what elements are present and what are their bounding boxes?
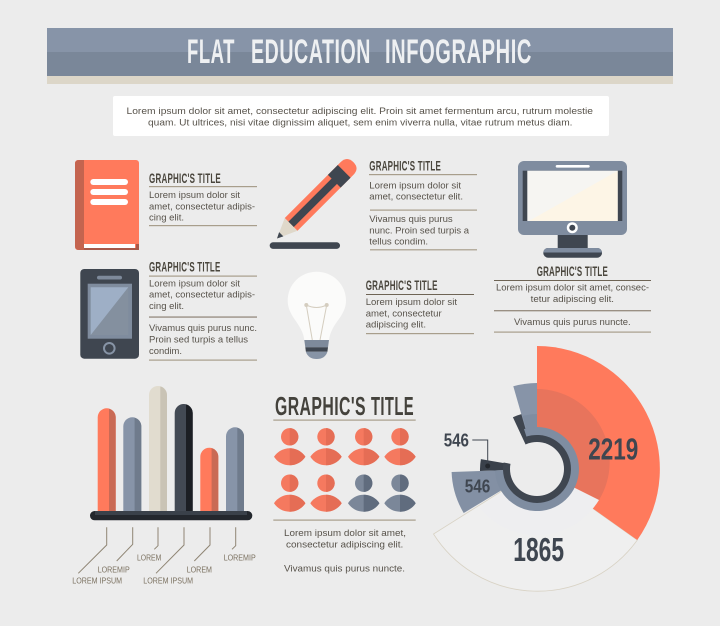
text block: bulb: adipiscing elit. — [366, 320, 426, 331]
text block: bulb: amet, consectetur — [366, 308, 442, 319]
bar 1 — [98, 408, 116, 511]
text block: phone: amet, consectetur adipis- — [149, 290, 255, 301]
text block: book: cing elit. — [149, 213, 184, 224]
text block: book — [149, 170, 257, 226]
heading: people chart: TITLE — [371, 391, 414, 421]
bar chart leader lines and labels: LOREM IPSUM — [143, 577, 193, 586]
bar chart leader lines and labels: LOREM — [137, 554, 161, 563]
text block: pencil: Lorem ipsum dolor sit — [369, 180, 461, 191]
text block: pencil: amet, consectetur elit. — [369, 192, 463, 203]
pictogram: people — [274, 428, 416, 512]
text block: book: amet, consectetur adipis- — [149, 201, 255, 212]
title — [187, 33, 532, 71]
intro text box: Lorem ipsum dolor sit amet, consectetur adipiscing elit. Proin sit amet fermentum arcu, rutrum molestie — [126, 106, 593, 117]
chart base — [90, 511, 252, 520]
value: 546 inside: 546 — [465, 477, 490, 497]
header banner — [47, 28, 673, 84]
text block: monitor: GRAPHIC'S TITLE — [537, 263, 608, 279]
title: FLAT — [187, 33, 235, 71]
text block: phone: Proin sed turpis a tellus — [149, 335, 248, 346]
wedge: dark left — [480, 459, 537, 471]
wedge: gray top inner band — [523, 414, 537, 469]
text block: pencil: nunc. Proin sed turpis a — [369, 225, 470, 236]
bar 3 — [149, 386, 167, 511]
bar chart — [90, 386, 252, 520]
icon: light bulb — [288, 272, 346, 359]
chart hole — [510, 442, 564, 496]
wedge: dark top — [513, 414, 537, 469]
bar 4 — [175, 404, 193, 511]
bar chart leader lines and labels — [72, 527, 256, 586]
title: INFOGRAPHIC — [385, 33, 532, 71]
text block: people chart — [273, 520, 416, 574]
text block: monitor: Lorem ipsum dolor sit amet, consec- — [496, 283, 649, 294]
text block: phone — [149, 259, 257, 361]
wedge: gray left — [452, 469, 537, 513]
intro text box: quam. Ut ultrices, nisi vitae dignissim aliquet, sem enim viverra nulla, vitae rutrum metus diam. — [148, 118, 572, 129]
wedge: gray top — [513, 383, 537, 469]
icon: monitor — [518, 161, 627, 258]
value: 546 callout: 546 — [444, 431, 469, 451]
text block: book: Lorem ipsum dolor sit — [149, 190, 240, 201]
bar 5 — [200, 448, 218, 511]
text block: bulb: Lorem ipsum dolor sit — [366, 297, 457, 308]
bar 2 — [123, 417, 141, 511]
radial chart — [434, 346, 660, 591]
ring: dark — [503, 435, 571, 503]
text block: people chart: Vivamus quis purus nuncte. — [284, 563, 405, 574]
sector: 2219 — [537, 346, 660, 540]
text block: people chart: Lorem ipsum dolor sit amet, — [284, 528, 406, 539]
value: 2219: 2219 — [588, 431, 638, 466]
icon: pencil — [270, 156, 360, 249]
text block: pencil — [369, 158, 477, 250]
text block: phone: condim. — [149, 346, 182, 357]
inner overlay: coral — [537, 389, 610, 500]
bar chart leader lines and labels: LOREMIP — [98, 565, 130, 574]
text block: phone: Lorem ipsum dolor sit — [149, 278, 240, 289]
text block: bulb: GRAPHIC'S TITLE — [366, 277, 438, 293]
icon: phone — [80, 269, 139, 359]
text block: phone: Vivamus quis purus nunc. — [149, 323, 257, 334]
text block: bulb — [366, 277, 474, 334]
bar 6 — [226, 427, 244, 511]
intro text box — [113, 96, 609, 136]
title: EDUCATION — [251, 33, 371, 71]
text block: book: GRAPHIC'S TITLE — [149, 170, 221, 186]
text block: pencil: Vivamus quis purus — [369, 214, 453, 225]
bar chart leader lines and labels: LOREMIP — [224, 554, 256, 563]
text block: phone: GRAPHIC'S TITLE — [149, 259, 220, 275]
inner overlay: white — [480, 469, 599, 535]
heading: people chart: GRAPHIC'S — [275, 391, 366, 421]
icon: book — [75, 160, 139, 250]
text block: monitor: tetur adipiscing elit. — [531, 294, 614, 305]
bar chart leader lines and labels: LOREM — [187, 565, 212, 574]
sector: 1865 — [434, 469, 637, 591]
text block: phone: cing elit. — [149, 301, 184, 312]
text block: pencil: tellus condim. — [369, 237, 428, 248]
text block: pencil: GRAPHIC'S TITLE — [369, 158, 441, 174]
text block: monitor — [494, 263, 651, 333]
value: 546 callout — [444, 431, 490, 468]
text block: people chart: consectetur adipiscing elit. — [286, 540, 403, 551]
value: 1865: 1865 — [513, 531, 564, 568]
bar chart leader lines and labels: LOREM IPSUM — [72, 577, 122, 586]
text block: monitor: Vivamus quis purus nuncte. — [514, 317, 631, 328]
ring: gray — [495, 427, 579, 511]
